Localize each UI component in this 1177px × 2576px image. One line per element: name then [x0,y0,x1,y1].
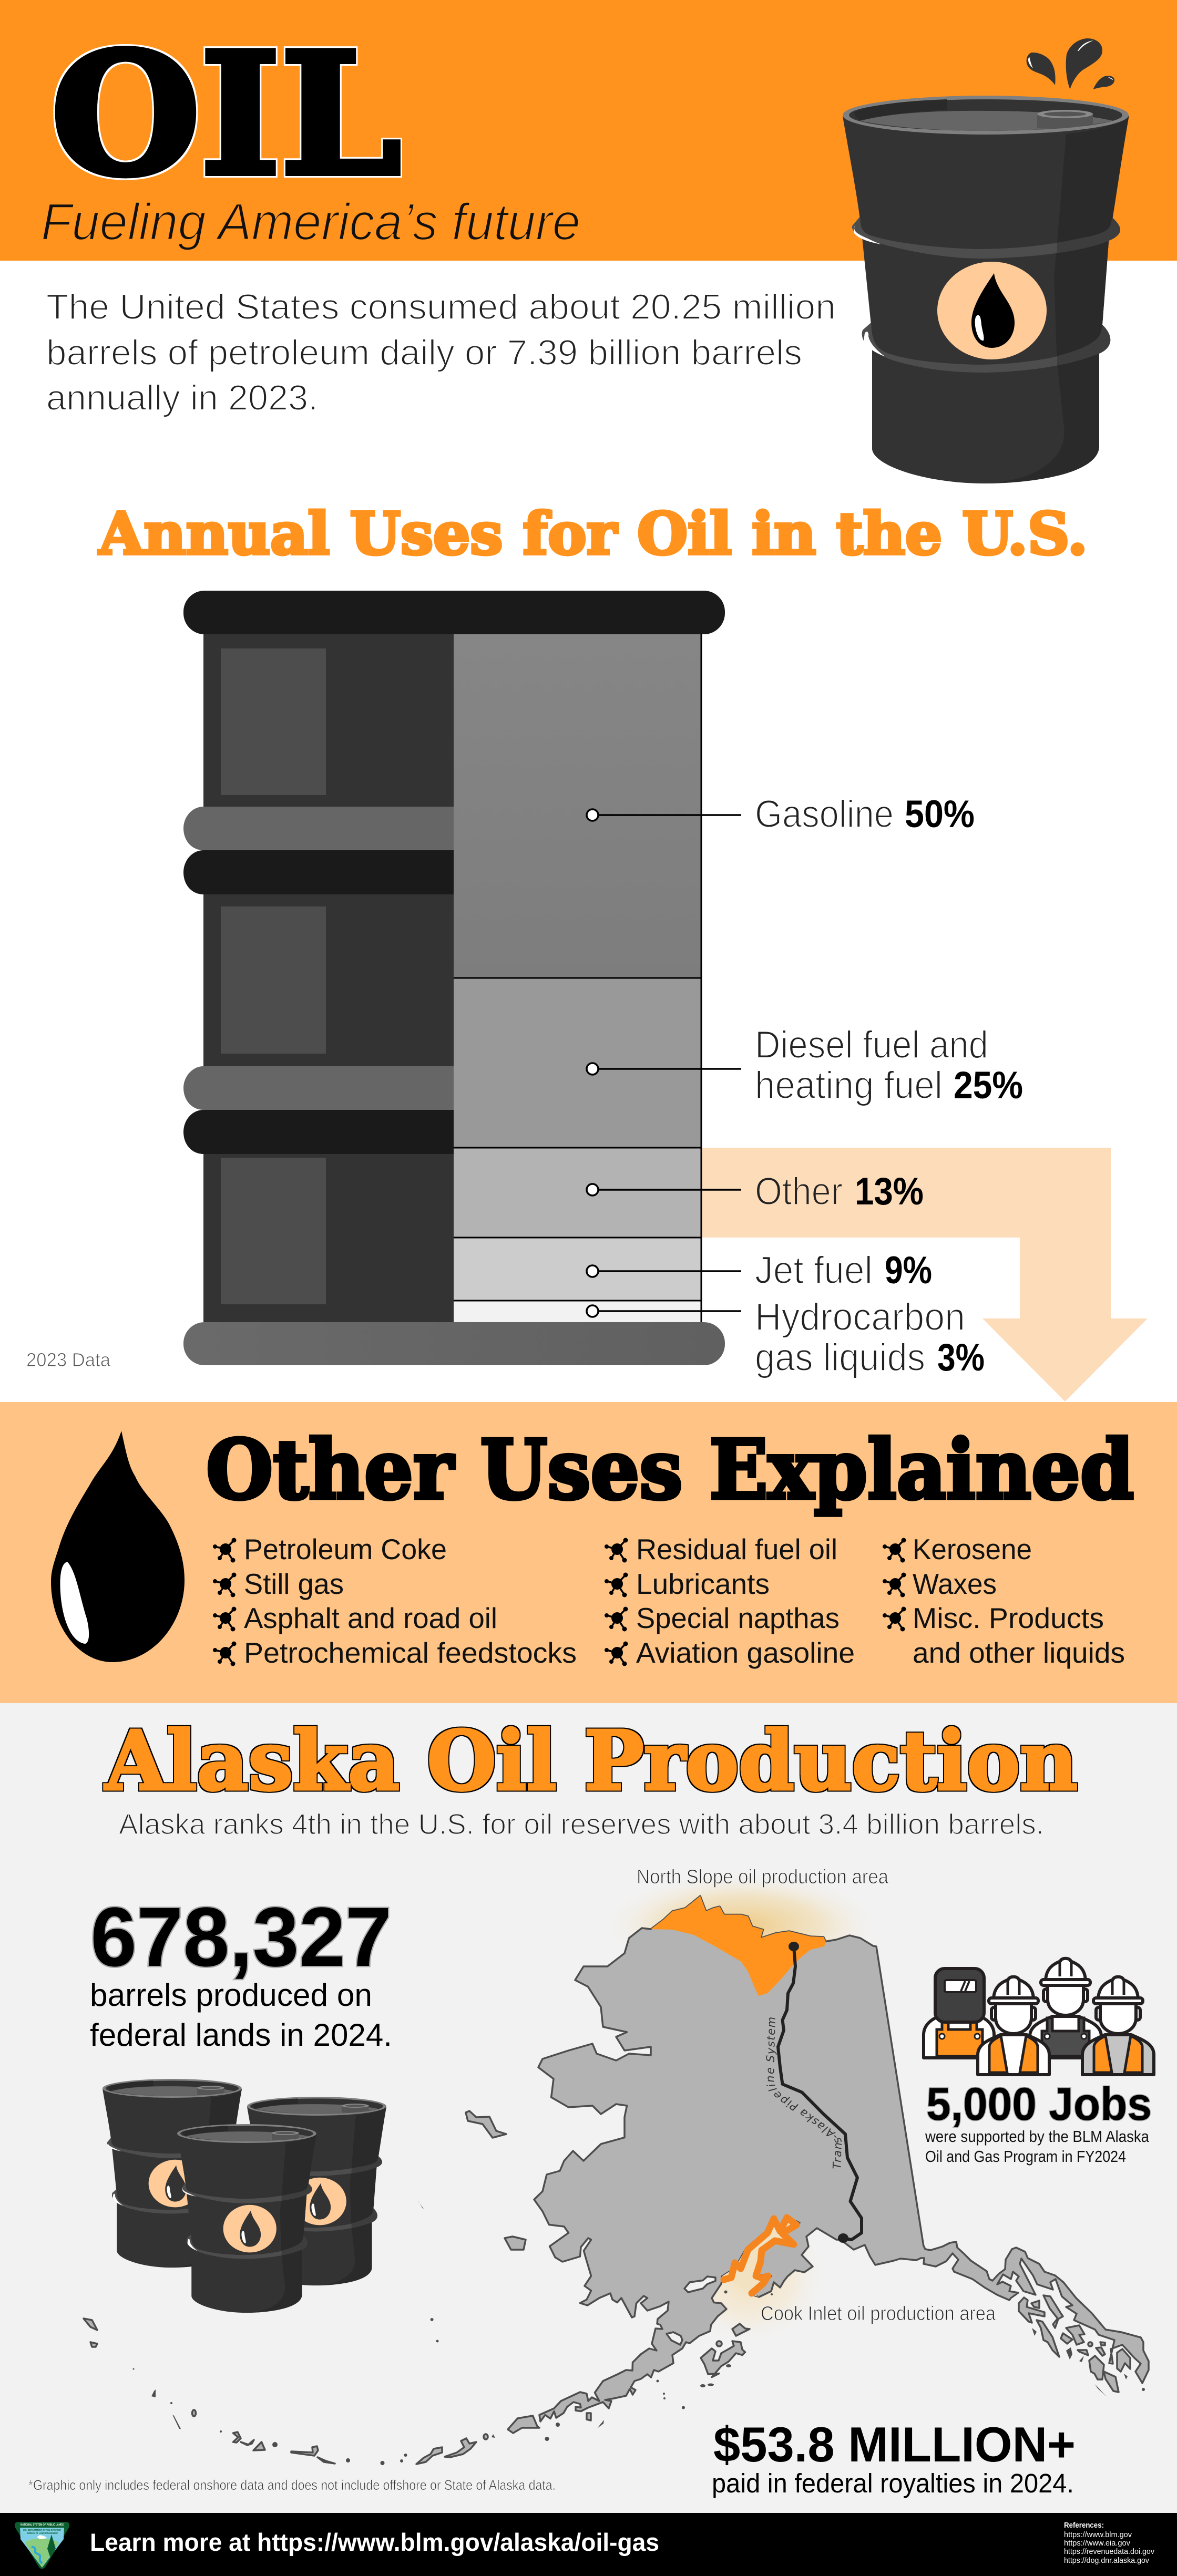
segment: diesel [454,978,701,1148]
area: Cook Inlet production [722,2217,800,2297]
subtitle: Fueling America’s future [41,193,580,251]
list column 3: Misc. Products [913,1602,1104,1634]
barrel top cap [183,591,725,634]
land: Alaska mainland [534,1896,1149,2422]
references: https://www.eia.gov [1064,2539,1131,2548]
stat: royalties: paid in federal royalties in 2024. [712,2468,1074,2498]
references: https://dog.dnr.alaska.gov [1064,2557,1150,2565]
barrel bottom cap [183,1322,725,1365]
list column 3: Kerosene [913,1533,1032,1565]
segment: hydrocarbon gas liquids [454,1301,701,1322]
label: gasoline: Gasoline [755,793,894,836]
lakes [667,2276,715,2345]
label: diesel: Diesel fuel and [755,1024,988,1066]
glow: Cook Inlet [670,2204,828,2346]
panel: other uses explained [0,1402,1177,1703]
icon: BLM logo: NATIONAL SYSTEM OF PUBLIC LANDS [21,2523,64,2527]
references: https://revenuedata.doi.gov [1064,2548,1155,2556]
list column 1 [213,1533,577,1669]
list column 1: Asphalt and road oil [244,1602,497,1634]
label: diesel: heating fuel [755,1064,943,1107]
stat: jobs: were supported by the BLM Alaska [925,2127,1150,2146]
arrow: other flows to explained section [701,1148,1148,1402]
references [1064,2521,1155,2565]
intro text [46,287,836,418]
barrel ribs [183,807,454,1154]
segment: gasoline [454,634,701,978]
leader lines and dots [587,809,741,1317]
barrel highlight panels [221,648,326,1304]
icon: large oil barrel [843,96,1129,483]
barrel body [203,634,454,1322]
worker: grey shirt vest [1082,1977,1154,2075]
label: other: 13% [855,1170,924,1213]
list column 1: Still gas [244,1568,344,1600]
list column 3: Waxes [913,1568,997,1600]
list column 2: Special napthas [636,1602,840,1634]
heading: Alaska oil production: Alaska Oil Production [104,1713,1078,1809]
label: other [755,1170,924,1213]
footnote: *Graphic only includes federal onshore data and does not include offshore or State of Alaska data. [28,2477,556,2493]
islands [84,2111,1145,2465]
heading: annual uses: Annual Uses for Oil in the U.S. [98,500,1088,568]
stat: barrels produced: federal lands in 2024. [90,2017,392,2053]
intro text: barrels of petroleum daily or 7.39 billion barrels [46,333,802,373]
stat: jobs: 5,000 Jobs [926,2078,1152,2130]
worker: welder [924,1969,994,2058]
list column 3 [883,1533,1125,1669]
label: diesel: 25% [954,1064,1023,1107]
worker: dark overalls [1030,1959,1101,2058]
label: diesel [755,1024,1023,1107]
segment: jet fuel [454,1238,701,1301]
stat: jobs [925,2078,1152,2166]
heading: other uses explained: Other Uses Explained [206,1421,1134,1518]
header band [0,0,1177,261]
label: jet fuel [755,1249,932,1292]
label: Cook Inlet: Cook Inlet oil production area [761,2303,996,2325]
list column 2: Residual fuel oil [636,1533,837,1565]
icon: BLM logo [15,2522,69,2569]
data year note: 2023 Data [26,1349,111,1371]
label: gasoline: 50% [905,793,975,836]
icon: workers [924,1959,1154,2075]
stat: barrels produced: barrels produced on [90,1977,372,2013]
stat: jobs: Oil and Gas Program in FY2024 [925,2147,1126,2166]
label: hydrocarbon gas liquids: 3% [937,1336,985,1379]
stat: barrels produced [90,1890,392,2053]
icon: BLM logo: BUREAU OF LAND MANAGEMENT [27,2532,58,2534]
intro text: annually in 2023. [46,378,318,418]
label: hydrocarbon gas liquids [755,1296,985,1379]
list column 2 [605,1533,855,1669]
label: North Slope: North Slope oil production area [637,1866,889,1888]
icon: oil splash drops [1027,38,1114,89]
panel: Alaska production background [0,1703,1177,2513]
pipeline label: Trans-Alaska Pipeline System [766,2017,842,2168]
stat: royalties [712,2417,1076,2498]
Alaska subheading: Alaska ranks 4th in the U.S. for oil reserves with about 3.4 billion barrels. [119,1808,1044,1840]
icon: three oil barrels [103,2079,386,2313]
worker: white shirt vest [978,1977,1049,2075]
list column 1: Petroleum Coke [244,1533,447,1565]
list column 2: Aviation gasoline [636,1636,855,1669]
stat: royalties: $53.8 MILLION+ [713,2417,1076,2472]
area: North Slope production [651,1896,826,1996]
icon: large oil drop [51,1431,185,1662]
main title: OIL [51,16,401,212]
label: hydrocarbon gas liquids: gas liquids [755,1336,925,1379]
footer link: Learn more at https://www.blm.gov/alaska/oil-gas [90,2528,659,2556]
glow: North Slope [599,1871,883,1981]
label: other: Other [755,1170,843,1213]
references: https://www.blm.gov [1064,2531,1132,2539]
icon: BLM logo: U.S. DEPARTMENT OF THE INTERIOR [23,2529,62,2531]
stat: barrels produced: 678,327 [90,1890,392,1984]
list column 1: Petrochemical feedstocks [244,1636,577,1669]
pipeline: Trans-Alaska [778,1942,862,2243]
intro text: The United States consumed about 20.25 million [46,287,836,327]
segment: other [454,1148,701,1238]
label: jet fuel: Jet fuel [755,1249,873,1292]
chart: barrel divided by oil use [183,591,725,1365]
map: Alaska [83,1881,1150,2465]
list column 3: and other liquids [913,1636,1125,1669]
label: jet fuel: 9% [885,1249,932,1292]
list column 2: Lubricants [636,1568,770,1600]
references: References: [1064,2521,1104,2530]
label: gasoline [755,793,975,836]
footer [0,2513,1177,2576]
label: hydrocarbon gas liquids: Hydrocarbon [755,1296,965,1338]
